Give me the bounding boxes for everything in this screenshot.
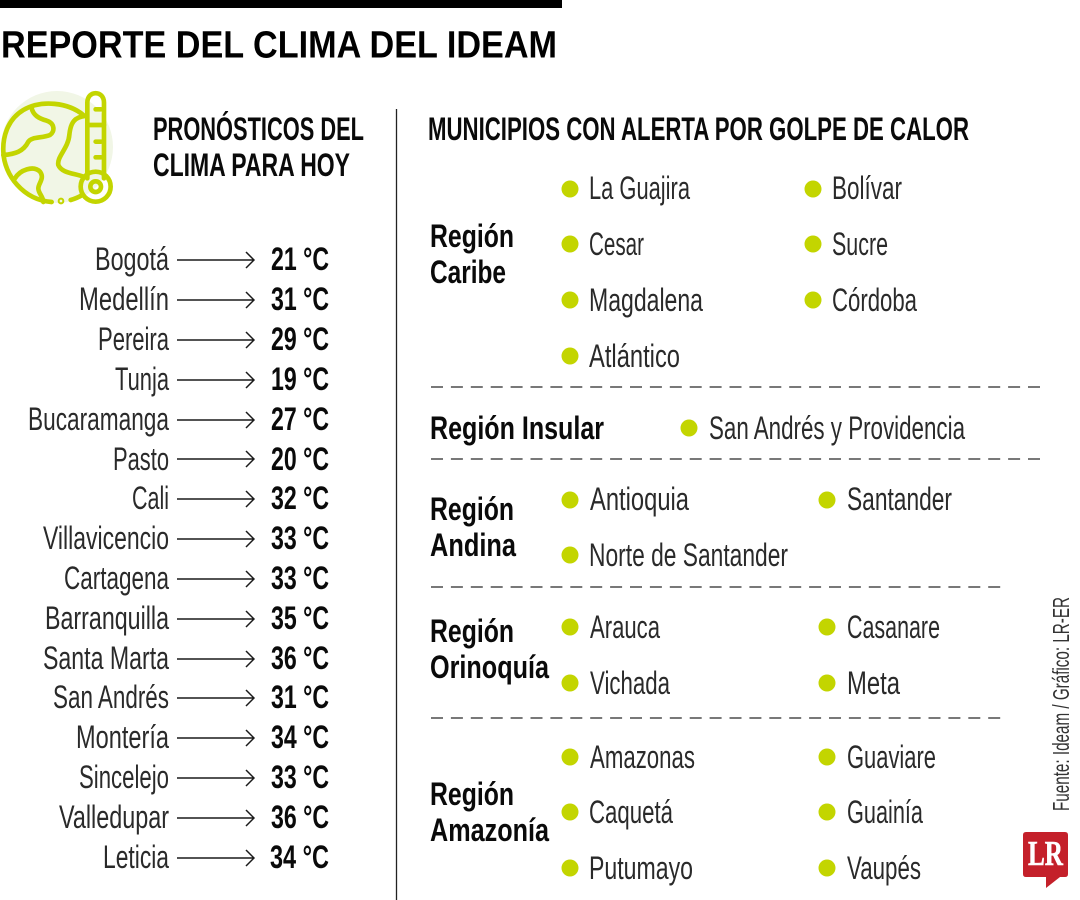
row: Pereira: 29 °C	[271, 321, 329, 357]
row: San Andrés: 31 °C	[271, 679, 329, 715]
row: Pereira	[98, 321, 329, 357]
row: Cartagena: Cartagena	[64, 560, 169, 596]
row: Bogotá: Bogotá	[95, 241, 169, 277]
row: Tunja: Tunja	[115, 361, 169, 397]
panel: Región Orinoquía: Región	[430, 613, 514, 649]
panel: Región Amazonía: Vaupés	[847, 850, 921, 886]
panel: Región Orinoquía: Orinoquía	[430, 649, 549, 685]
row: Leticia: 34 °C	[270, 839, 329, 875]
row: Villavicencio: Villavicencio	[43, 520, 169, 556]
panel: Región Caribe: Bolívar	[832, 170, 902, 206]
panel: Región Amazonía: Guainía	[847, 794, 923, 830]
panel: Región Orinoquía	[430, 609, 940, 701]
vertical divider	[396, 109, 398, 900]
row: Tunja: 19 °C	[271, 361, 329, 397]
row: Pasto: 20 °C	[271, 441, 329, 477]
panel: Región Caribe: Región	[430, 218, 514, 254]
row: Bucaramanga: 27 °C	[271, 401, 329, 437]
panel: Región Caribe: Córdoba	[832, 282, 917, 318]
row: Bogotá	[95, 241, 329, 277]
panel: Región Amazonía: Amazonía	[430, 812, 549, 848]
panel: Región Amazonía	[430, 739, 936, 886]
row: Montería	[76, 719, 329, 755]
row: Sincelejo: 33 °C	[271, 759, 329, 795]
row: Cali: 32 °C	[271, 480, 329, 516]
row: Cartagena: 33 °C	[271, 560, 329, 596]
row: Barranquilla: 35 °C	[271, 600, 329, 636]
panel: Región Orinoquía: Casanare	[847, 609, 940, 645]
row: Pasto: Pasto	[113, 441, 169, 477]
row: Leticia	[103, 839, 329, 875]
row: Pasto	[113, 441, 329, 477]
row: Bucaramanga: Bucaramanga	[28, 401, 169, 437]
panel: Región Amazonía: Guaviare	[847, 739, 936, 775]
row: Medellín: Medellín	[79, 281, 169, 317]
row: Pereira: Pereira	[98, 321, 169, 357]
top bar	[0, 0, 562, 8]
panel: Región Amazonía: Putumayo	[589, 850, 693, 886]
row: Cartagena	[64, 560, 329, 596]
row: Villavicencio: 33 °C	[271, 520, 329, 556]
row: Medellín: 31 °C	[271, 281, 329, 317]
logo: LR: LR	[1028, 834, 1064, 873]
panel: Región Insular: San Andrés y Providencia	[709, 410, 965, 446]
panel: Región Orinoquía: Vichada	[590, 665, 670, 701]
panel: Región Caribe: Cesar	[589, 226, 644, 262]
panel: Región Insular	[430, 410, 965, 446]
row: Villavicencio	[43, 520, 329, 556]
source note: Fuente: Ideam / Gráfico: LR-ER	[1048, 597, 1074, 811]
panel: Región Caribe: Magdalena	[589, 282, 703, 318]
row: Medellín	[79, 281, 329, 317]
panel: Región Andina: Antioquia	[590, 481, 689, 517]
row: Tunja	[115, 361, 329, 397]
panel: Región Caribe: Atlántico	[589, 338, 680, 374]
panel: Región Andina: Norte de Santander	[589, 537, 788, 573]
row: Valledupar: 36 °C	[271, 799, 329, 835]
row: Cali: Cali	[132, 480, 169, 516]
panel: Región Caribe: La Guajira	[589, 170, 690, 206]
row: Cali	[132, 480, 329, 516]
row: Leticia: Leticia	[103, 839, 169, 875]
panel: Región Amazonía: Amazonas	[590, 739, 695, 775]
panel: Región Orinoquía: Arauca	[590, 609, 660, 645]
logo: LR	[1023, 832, 1068, 888]
row: Barranquilla: Barranquilla	[45, 600, 169, 636]
panel: Región Amazonía: Región	[430, 776, 514, 812]
panel: Región Orinoquía: Meta	[847, 665, 900, 701]
title: REPORTE DEL CLIMA DEL IDEAM	[1, 24, 557, 66]
forecast table: cities and temperatures	[28, 241, 329, 875]
row: Santa Marta: 36 °C	[271, 640, 329, 676]
panel: Región Andina: Santander	[847, 481, 952, 517]
panel: Región Insular: Región Insular	[430, 410, 604, 446]
row: San Andrés: San Andrés	[53, 679, 169, 715]
panel: Región Andina: Región	[430, 491, 514, 527]
row: Bogotá: 21 °C	[271, 241, 329, 277]
row: Barranquilla	[45, 600, 329, 636]
panel: Región Andina: Andina	[430, 527, 516, 563]
row: Bucaramanga	[28, 401, 329, 437]
heading: pronósticos	[153, 111, 364, 183]
heading: pronósticos: CLIMA PARA HOY	[153, 147, 350, 183]
row: Montería: 34 °C	[271, 719, 329, 755]
panel: Región Caribe: Sucre	[832, 226, 888, 262]
panel: Región Caribe	[430, 170, 917, 374]
row: Santa Marta	[43, 640, 329, 676]
row: Santa Marta: Santa Marta	[43, 640, 169, 676]
panel: Región Andina	[430, 481, 952, 573]
row: Valledupar	[59, 799, 329, 835]
row: Sincelejo: Sincelejo	[79, 759, 169, 795]
row: Sincelejo	[79, 759, 329, 795]
row: Valledupar: Valledupar	[59, 799, 169, 835]
panel: Región Caribe: Caribe	[430, 254, 506, 290]
panel: Región Amazonía: Caquetá	[589, 794, 673, 830]
heading: pronósticos: PRONÓSTICOS DEL	[153, 111, 364, 147]
icon: globe with thermometer	[1, 91, 113, 203]
row: San Andrés	[53, 679, 329, 715]
row: Montería: Montería	[76, 719, 169, 755]
